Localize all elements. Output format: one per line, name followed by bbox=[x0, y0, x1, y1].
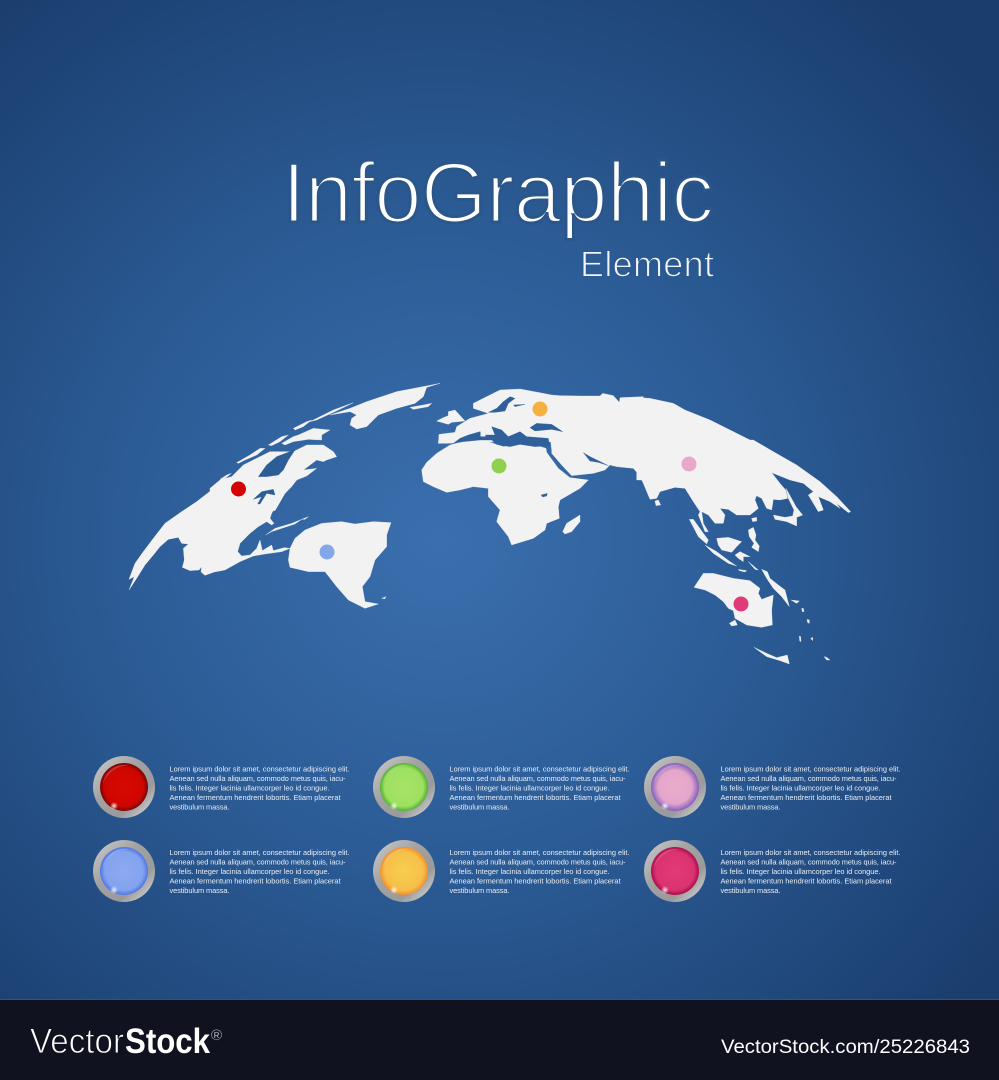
button: blue bbox=[93, 840, 155, 902]
text: blue: Aenean fermentum hendrerit lobortis. Etiam placerat bbox=[170, 876, 340, 886]
tasmania bbox=[729, 620, 737, 626]
footer id: VectorStock.com/25226843 bbox=[721, 1036, 970, 1058]
borneo bbox=[717, 537, 742, 552]
text: green: vestibulum massa. bbox=[450, 802, 510, 812]
inland waters: north america bbox=[253, 450, 295, 504]
text: pink: Aenean fermentum hendrerit lobortis. Etiam placerat bbox=[720, 793, 892, 802]
pin: crimson bbox=[734, 596, 748, 612]
text: orange: lis felis. Integer lacinia ullamcorper leo id congue. bbox=[450, 867, 610, 876]
hainan bbox=[752, 517, 757, 522]
text: crimson: Aenean fermentum hendrerit lobortis. Etiam placerat bbox=[720, 876, 892, 886]
africa bbox=[422, 439, 588, 545]
asia east body bbox=[640, 440, 851, 532]
madagascar bbox=[563, 515, 580, 534]
text: pink: vestibulum massa. bbox=[720, 802, 780, 812]
sumatra bbox=[689, 519, 708, 544]
text: orange: Lorem ipsum dolor sit amet, consectetur adipiscing elit. bbox=[450, 848, 630, 857]
pin: pink bbox=[682, 456, 696, 472]
map: north america north bbox=[210, 383, 440, 511]
lake victoria bbox=[541, 493, 547, 497]
arctic islands bbox=[220, 473, 231, 480]
text: red: vestibulum massa. bbox=[170, 802, 230, 812]
baltic bbox=[488, 397, 515, 412]
text: orange: Aenean fermentum hendrerit lobortis. Etiam placerat bbox=[450, 876, 620, 886]
hudson bay bbox=[258, 450, 295, 477]
canada mainland bbox=[210, 445, 337, 511]
baffin island bbox=[282, 428, 330, 445]
new zealand bbox=[754, 647, 789, 664]
world map bbox=[129, 383, 851, 664]
text: blue: vestibulum massa. bbox=[170, 886, 230, 895]
footer logo: Stock bbox=[125, 1022, 210, 1061]
text: red: Aenean fermentum hendrerit lobortis. Etiam placerat bbox=[170, 793, 340, 802]
footer logo bbox=[30, 1022, 222, 1061]
text: pink: lis felis. Integer lacinia ullamcorper leo id congue. bbox=[720, 784, 880, 792]
persian gulf bbox=[583, 453, 608, 466]
text: blue: lis felis. Integer lacinia ullamcorper leo id congue. bbox=[170, 867, 330, 876]
text: orange: Aenean sed nulla aliquam, commodo metus quis, iacu- bbox=[450, 858, 626, 866]
footer logo: ® bbox=[211, 1027, 222, 1044]
black sea bbox=[530, 423, 563, 432]
footer bar bbox=[0, 999, 999, 1080]
text: green: Aenean sed nulla aliquam, commodo metus quis, iacu- bbox=[450, 774, 626, 783]
java bbox=[705, 545, 737, 566]
japan bbox=[773, 488, 803, 526]
text: crimson bbox=[720, 848, 900, 895]
gulf of finland bbox=[513, 404, 525, 407]
button: pink bbox=[644, 756, 706, 818]
great lakes bbox=[253, 489, 275, 504]
text: red bbox=[170, 764, 350, 812]
sulawesi bbox=[735, 552, 750, 562]
map: north asia band bbox=[637, 397, 757, 480]
sri lanka bbox=[655, 500, 661, 506]
text: crimson: lis felis. Integer lacinia ullamcorper leo id congue. bbox=[720, 867, 880, 876]
text: crimson: vestibulum massa. bbox=[720, 886, 780, 895]
hispaniola bbox=[302, 517, 308, 519]
inland waters: europe bbox=[453, 397, 608, 497]
north america body bbox=[129, 480, 297, 590]
text: green: lis felis. Integer lacinia ullamcorper leo id congue. bbox=[450, 784, 610, 792]
falklands bbox=[382, 597, 386, 599]
text: red: Aenean sed nulla aliquam, commodo metus quis, iacu- bbox=[170, 774, 346, 783]
subtitle: Element bbox=[580, 244, 714, 284]
iceland bbox=[410, 403, 432, 409]
text: crimson: Aenean sed nulla aliquam, commodo metus quis, iacu- bbox=[720, 858, 897, 866]
pin: green bbox=[492, 458, 506, 474]
pin: red bbox=[231, 482, 246, 496]
text: pink: Lorem ipsum dolor sit amet, consectetur adipiscing elit. bbox=[720, 764, 900, 774]
button: red bbox=[93, 756, 155, 818]
sardinia bbox=[481, 430, 485, 436]
mediterranean bbox=[453, 427, 549, 447]
text: blue: Aenean sed nulla aliquam, commodo metus quis, iacu- bbox=[170, 858, 346, 866]
text: red: Lorem ipsum dolor sit amet, consectetur adipiscing elit. bbox=[170, 764, 350, 774]
text: green: Lorem ipsum dolor sit amet, consectetur adipiscing elit. bbox=[450, 764, 630, 774]
button: orange bbox=[373, 840, 435, 902]
greenland bbox=[330, 383, 440, 429]
map pins bbox=[231, 402, 748, 612]
europe and west asia bbox=[438, 389, 643, 480]
cuba bbox=[266, 519, 302, 535]
britain bbox=[437, 410, 465, 424]
map: east asia bbox=[640, 440, 851, 566]
map: europe and africa bbox=[422, 389, 643, 545]
text: orange bbox=[450, 848, 630, 895]
text: pink: Aenean sed nulla aliquam, commodo metus quis, iacu- bbox=[720, 774, 897, 783]
map: oceania bbox=[694, 562, 830, 664]
text: blue bbox=[170, 848, 350, 895]
pin: blue bbox=[320, 544, 334, 560]
text: blue: Lorem ipsum dolor sit amet, consectetur adipiscing elit. bbox=[170, 848, 350, 857]
text: crimson: Lorem ipsum dolor sit amet, consectetur adipiscing elit. bbox=[720, 848, 900, 857]
philippines bbox=[748, 527, 759, 552]
button: green bbox=[373, 756, 435, 818]
text: green bbox=[450, 764, 630, 812]
south america bbox=[288, 522, 391, 608]
map: north america south and south america bbox=[129, 480, 391, 608]
button: crimson bbox=[644, 840, 706, 902]
title: InfoGraphic bbox=[282, 146, 714, 241]
text: pink bbox=[720, 764, 900, 812]
text: green: Aenean fermentum hendrerit lobortis. Etiam placerat bbox=[450, 793, 620, 802]
new guinea bbox=[762, 569, 789, 607]
text: red: lis felis. Integer lacinia ullamcorper leo id congue. bbox=[170, 784, 330, 792]
australia bbox=[694, 573, 773, 627]
footer logo: Vector bbox=[30, 1022, 124, 1061]
small islands bbox=[791, 600, 799, 603]
pin: orange bbox=[532, 402, 548, 416]
text: orange: vestibulum massa. bbox=[450, 886, 510, 895]
